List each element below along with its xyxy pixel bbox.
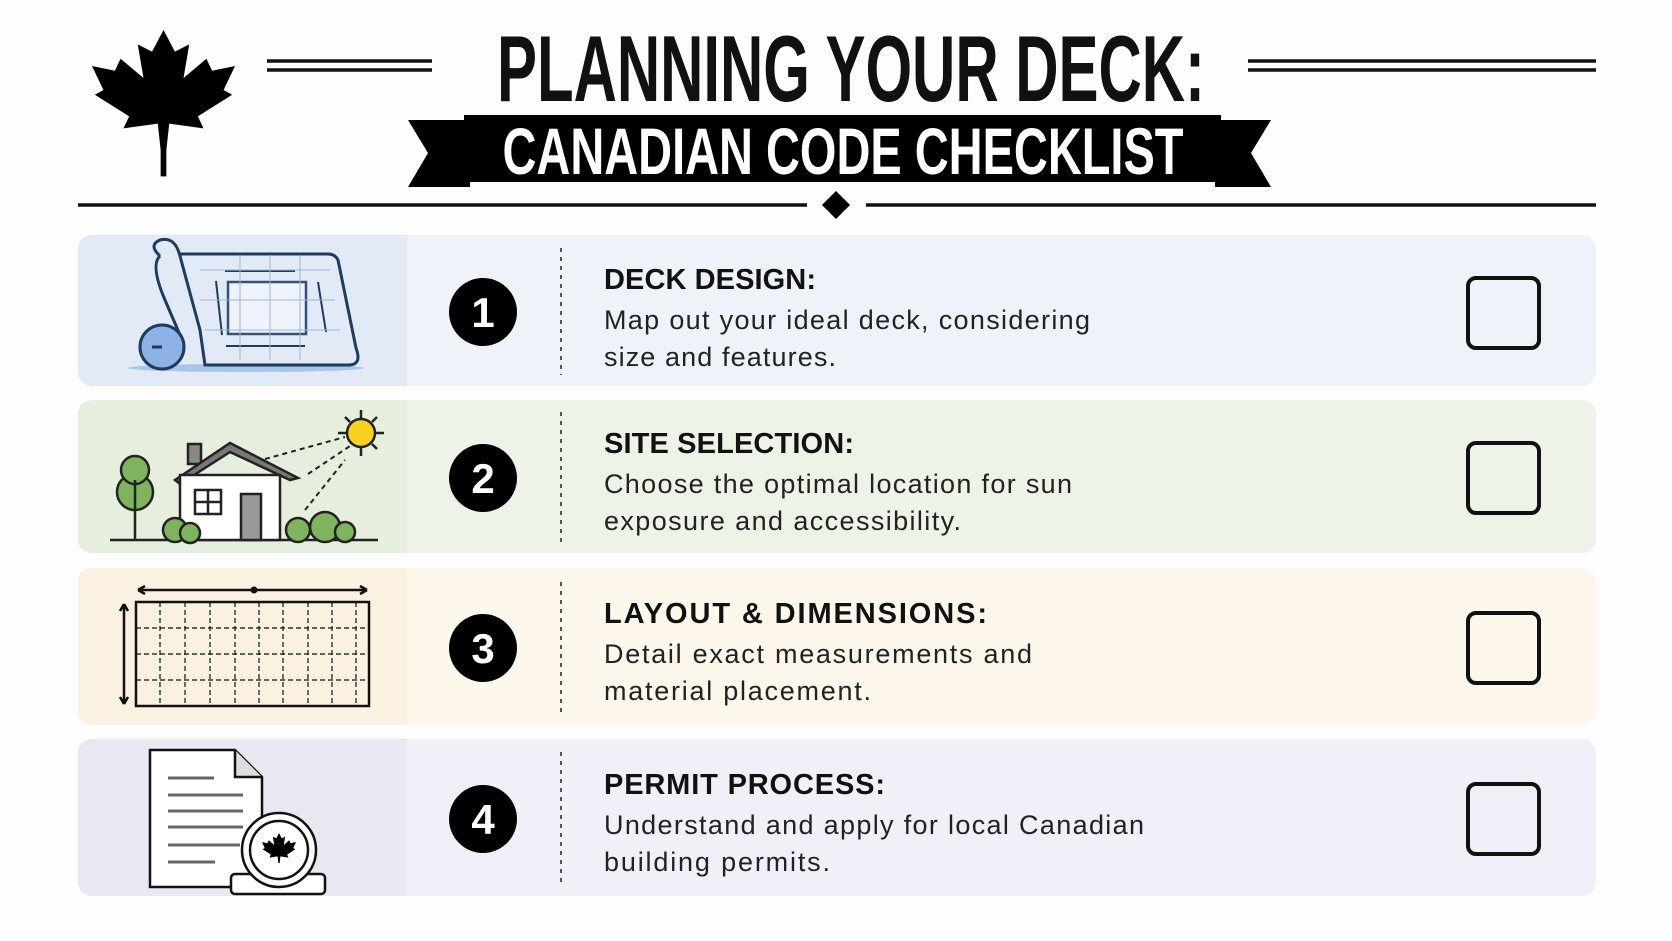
- text: site selection: exposure and accessibility.: [604, 506, 961, 536]
- number 1: 1: [471, 289, 495, 336]
- number 4: [449, 785, 517, 853]
- icon: grid with dimensions: [120, 586, 369, 706]
- icon: document with seal: [150, 750, 325, 894]
- text: site selection: [604, 428, 1072, 536]
- divider with diamond: [78, 191, 1596, 219]
- decorative double lines: [267, 61, 1596, 70]
- number 2: 2: [471, 455, 495, 502]
- text: permit: building permits.: [604, 847, 830, 877]
- text: deck design: DECK DESIGN:: [604, 264, 816, 296]
- text: layout: [604, 598, 1032, 706]
- number 4: 4: [471, 796, 495, 843]
- text: site selection: SITE SELECTION:: [604, 428, 854, 460]
- checkbox 2: [1468, 443, 1539, 513]
- checkbox 4: [1468, 784, 1539, 854]
- number 3: [449, 614, 517, 682]
- row 3: layout: [78, 568, 1596, 725]
- icon: blueprint: [128, 239, 364, 372]
- banner: subtitle ribbon: CANADIAN CODE CHECKLIST: [502, 114, 1184, 188]
- row 2: site selection: [78, 400, 1596, 553]
- row 1: deck design: [78, 235, 1596, 386]
- row 4: permit: [78, 739, 1596, 896]
- checkbox 1: [1468, 278, 1539, 348]
- text: deck design: Map out your ideal deck, considering: [604, 305, 1090, 335]
- text: layout: Detail exact measurements and: [604, 639, 1032, 669]
- text: permit: Understand and apply for local Canadian: [604, 810, 1144, 840]
- text: deck design: [604, 264, 1090, 372]
- text: layout: LAYOUT & DIMENSIONS:: [604, 598, 987, 630]
- title: PLANNING YOUR DECK:: [497, 16, 1205, 121]
- number 3: 3: [471, 625, 495, 672]
- text: site selection: Choose the optimal location for sun: [604, 469, 1072, 499]
- text: deck design: size and features.: [604, 342, 836, 372]
- icon: maple leaf: [92, 30, 235, 176]
- text: layout: material placement.: [604, 676, 871, 706]
- icon: house and sun: [110, 410, 384, 543]
- text: permit: PERMIT PROCESS:: [604, 769, 885, 801]
- number 1: [449, 278, 517, 346]
- checkbox 3: [1468, 613, 1539, 683]
- number 2: [449, 444, 517, 512]
- text: permit: [604, 769, 1144, 877]
